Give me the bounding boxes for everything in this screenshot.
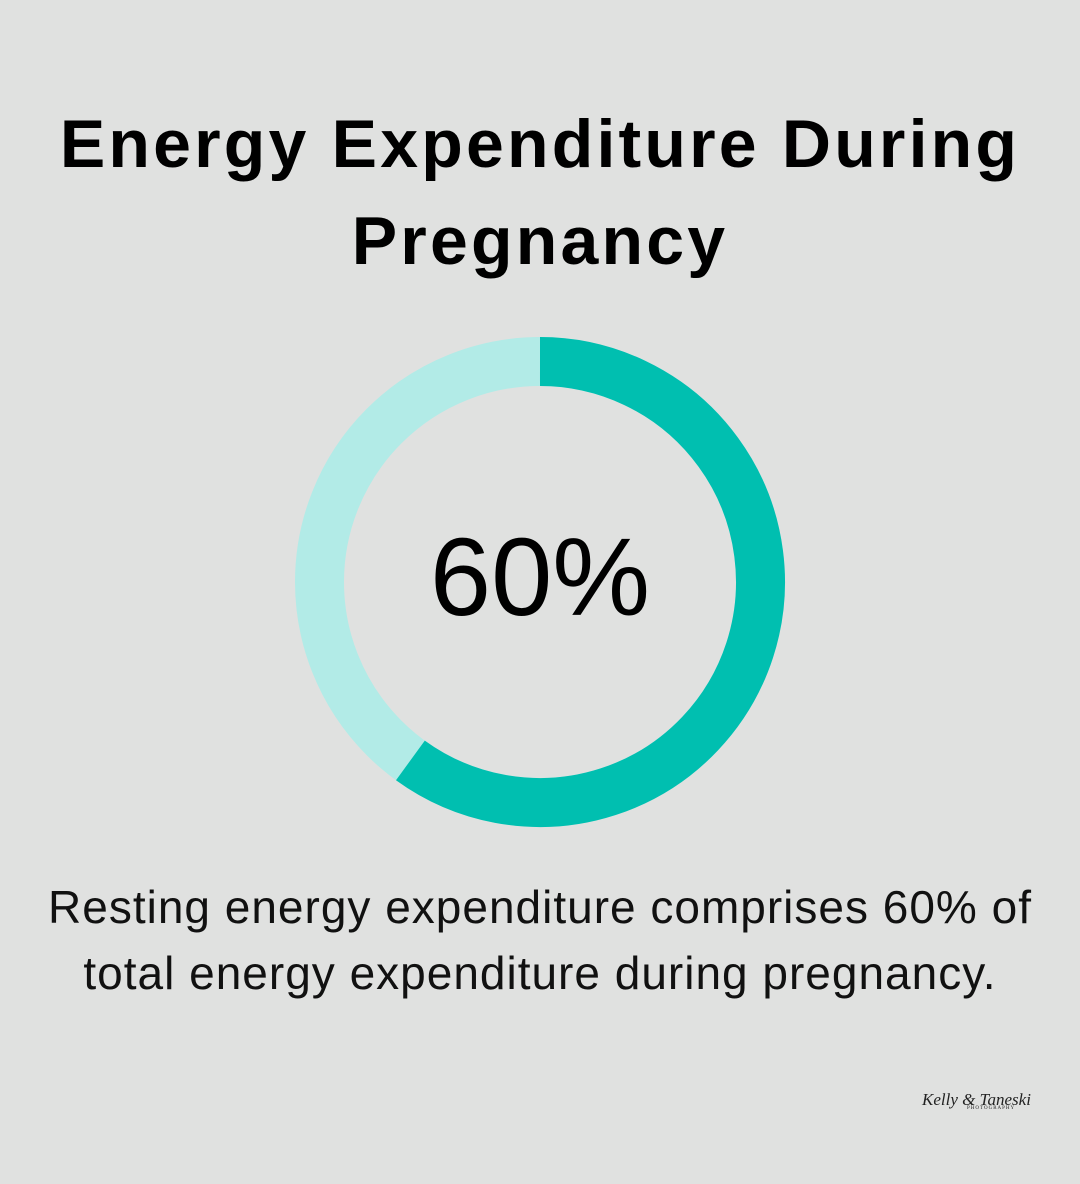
title: Pregnancy [352,203,728,279]
title [60,106,1020,279]
description text: total energy expenditure during pregnancy. [83,947,997,999]
description text: Resting energy expenditure comprises 60% of [48,881,1032,933]
title: Energy Expenditure During [60,106,1020,182]
logo: Kelly & Taneski [922,1090,1031,1109]
donut chart: 60% [430,516,650,639]
description text [48,881,1032,999]
logo: PHOTOGRAPHY [967,1106,1015,1111]
